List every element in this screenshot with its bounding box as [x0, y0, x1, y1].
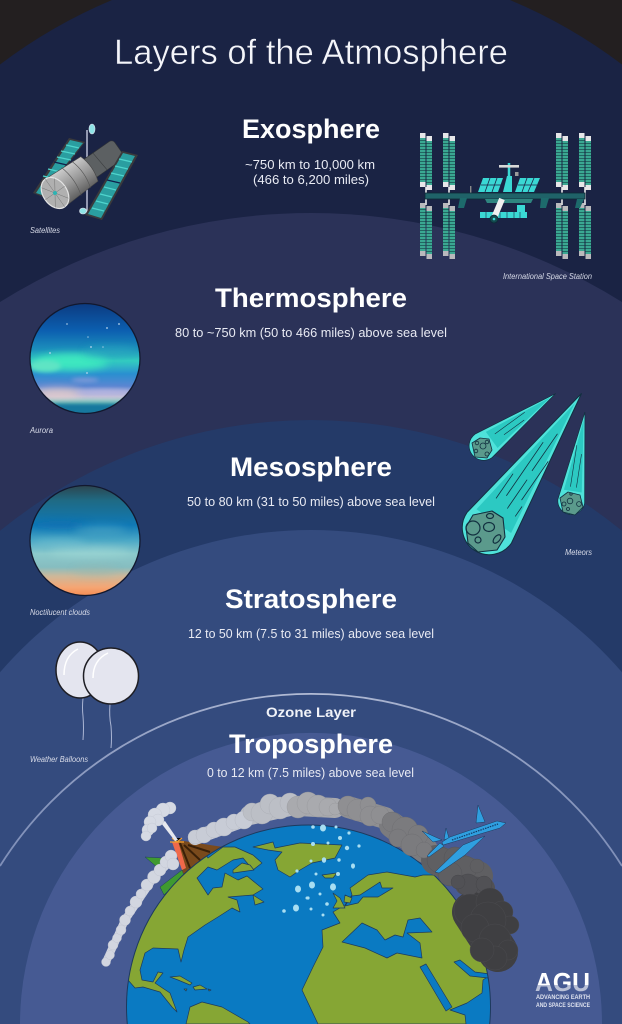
- icon: volcano: [145, 821, 223, 895]
- image: aurora: [29, 303, 140, 414]
- water: red sea: [420, 964, 452, 1011]
- text: thermosphere altitude: 80 to ~750 km (50 to 466 miles) above sea level: [175, 325, 447, 340]
- truss: [425, 193, 585, 199]
- land: british isles: [333, 893, 352, 908]
- earth: [126, 824, 491, 1024]
- label: ozone layer: Ozone Layer: [266, 704, 357, 720]
- icon: small right meteor: [556, 410, 598, 516]
- caption: noctilucent clouds: Noctilucent clouds: [30, 608, 90, 617]
- text: troposphere altitude: 0 to 12 km (7.5 miles) above sea level: [207, 765, 414, 780]
- smoke: rocket trail: [102, 850, 179, 966]
- land: caribbean islands: [170, 976, 211, 991]
- image: noctilucent clouds: [30, 485, 140, 596]
- upper solar arrays: [420, 133, 591, 190]
- heading: exosphere: Exosphere: [242, 114, 380, 144]
- icon: airplane: [422, 805, 506, 873]
- caption: international space station: International Space Station: [503, 272, 592, 281]
- heading: mesosphere: Mesosphere: [230, 452, 392, 482]
- water: persian gulf: [454, 960, 490, 978]
- land: south america: [186, 1002, 250, 1024]
- title: Layers of the Atmosphere: [114, 33, 508, 72]
- land: north america: [128, 846, 264, 1012]
- logo: AGU: AGU: [535, 967, 590, 997]
- text: exosphere altitude: ~750 km to 10,000 km: [245, 157, 375, 172]
- logo: AGU: ADVANCING EARTH: [536, 995, 590, 1001]
- lower modules: [458, 198, 584, 223]
- land: arctic island: [233, 863, 254, 873]
- heading: thermosphere: Thermosphere: [215, 283, 407, 313]
- water: baltic and north seas: [345, 882, 393, 906]
- heading: stratosphere: Stratosphere: [225, 584, 397, 614]
- icon: weather balloons: [56, 642, 138, 748]
- text: exosphere altitude: [245, 157, 375, 187]
- smoke: pollution band: [188, 792, 519, 970]
- text: mesosphere altitude: 50 to 80 km (31 to 50 miles) above sea level: [187, 494, 435, 509]
- water: mediterranean: [342, 918, 432, 958]
- ozone layer arc: [0, 694, 622, 866]
- smoke: volcanic plume: [141, 802, 176, 841]
- caption: aurora: Aurora: [29, 426, 54, 435]
- snow droplets: [282, 824, 361, 916]
- icon: large meteor: [452, 378, 604, 565]
- icon: small left meteor: [463, 382, 564, 466]
- panel: mesosphere layer: [0, 420, 622, 1024]
- text: stratosphere altitude: 12 to 50 km (7.5 to 31 miles) above sea level: [188, 626, 434, 641]
- land: eurasia and africa: [302, 872, 487, 1024]
- land: greenland: [253, 842, 342, 877]
- icon: international space station: [420, 133, 591, 259]
- caption: weather balloons: Weather Balloons: [30, 755, 88, 764]
- caption: satellites: Satellites: [30, 226, 60, 235]
- logo: AGU: [535, 967, 590, 1009]
- logo: AGU: AND SPACE SCIENCE: [536, 1003, 590, 1009]
- text: exosphere altitude: (466 to 6,200 miles): [253, 172, 369, 187]
- central module core: [470, 163, 540, 193]
- panel: stratosphere layer: [0, 530, 622, 1024]
- lower solar arrays: [420, 203, 591, 259]
- panel: troposphere layer: [20, 733, 602, 1024]
- solar array connectors: [426, 187, 585, 205]
- land: iceland: [322, 873, 337, 878]
- caption: meteors: Meteors: [565, 548, 592, 557]
- panel: thermosphere layer: [0, 213, 622, 1024]
- heading: troposphere: Troposphere: [229, 729, 393, 759]
- icon: satellite: [33, 124, 138, 220]
